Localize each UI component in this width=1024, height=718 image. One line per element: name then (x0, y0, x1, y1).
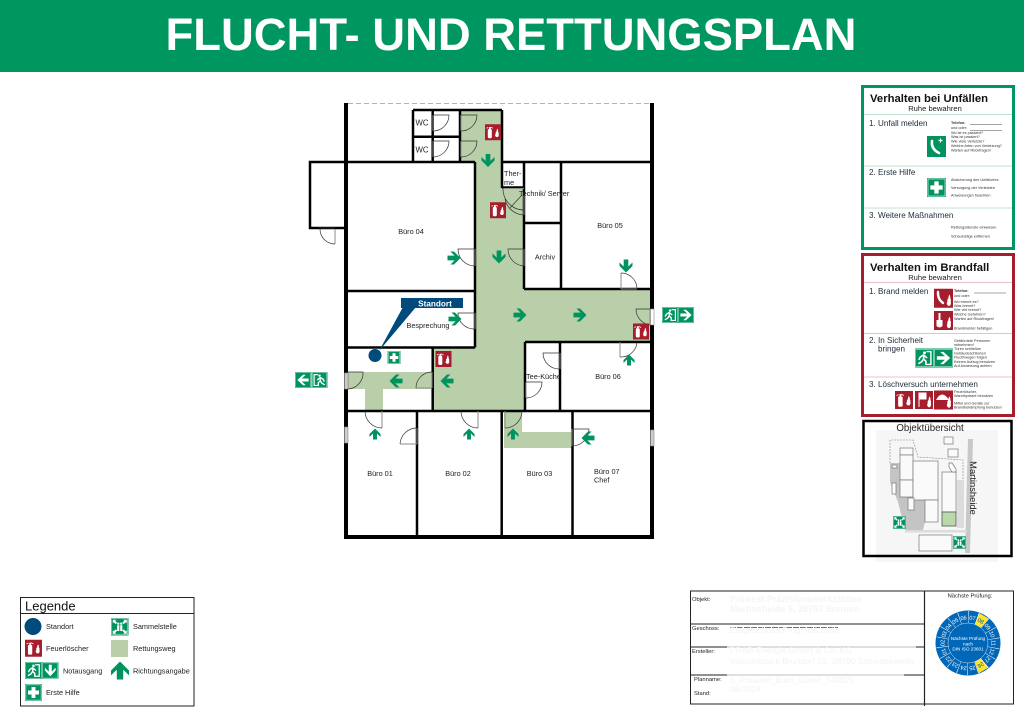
legend: Notausgang: Notausgang (63, 666, 102, 676)
panel: Verhalten im Brandfall: mitnehmen! (954, 343, 974, 347)
field labels: Planname: (694, 677, 722, 683)
field labels: Ersteller: (692, 649, 715, 655)
fire extinguisher signs (436, 124, 649, 367)
panel: Verhalten im Brandfall: Ruhe bewahren (908, 273, 962, 282)
panel: Verhalten im Brandfall (862, 254, 1014, 416)
icon: fire alarm (934, 311, 953, 330)
heading: Objektübersicht (896, 423, 964, 434)
windows (344, 309, 654, 446)
legend: Standort: Standort (46, 622, 74, 631)
panel: Verhalten bei Unfällen: Anweisungen beachten (951, 194, 990, 198)
room labels: Büro 01 (367, 469, 393, 478)
legend: Feuerlöscher: Feuerlöscher (46, 644, 89, 653)
legend: Erste Hilfe: Erste Hilfe (46, 688, 80, 697)
legend: Richtungsangabe: Richtungsangabe (133, 666, 190, 676)
panel: Verhalten bei Unfällen: Schaulustige entfernen (951, 234, 990, 238)
room labels: Büro 02 (445, 469, 471, 478)
exit sign left (295, 372, 328, 388)
inspection seal: 04 (945, 623, 954, 632)
room labels: Büro 03 (527, 469, 552, 478)
panel: Objektübersicht (864, 421, 1012, 562)
legend: Erste Hilfe (25, 684, 80, 701)
field values: Martinsheide 5, 28757 Bremen (730, 604, 859, 614)
inspection seal: 26 (976, 660, 984, 668)
inspection seal: 10 (987, 631, 995, 639)
icon: first aid (927, 178, 946, 197)
panel: Verhalten im Brandfall: Wie viel brennt? (954, 308, 981, 312)
field values: b_Prawest_Buro_Stand_240820 (730, 675, 854, 685)
legend: Rettungsweg: Rettungsweg (133, 644, 176, 653)
inspection seal: 03 (941, 631, 949, 639)
panel: Verhalten bei Unfällen: Verhalten bei Unfällen (870, 93, 988, 105)
panel: legend (20, 598, 194, 706)
panel: Verhalten im Brandfall: bringen (878, 344, 905, 354)
panel: Verhalten im Brandfall: Mittel und Geräte zur (954, 402, 990, 406)
field labels: Objekt: (692, 597, 711, 603)
inspection seal: 24 (960, 664, 967, 671)
panel: Verhalten im Brandfall: Telefon: (954, 289, 968, 293)
legend: Sammelstelle: Sammelstelle (133, 622, 177, 631)
room labels: Ther- (504, 169, 522, 178)
field values: Präwest Präzisionswerkstätten (730, 594, 862, 604)
panel: Verhalten bei Unfällen: und oder: (951, 126, 967, 130)
room labels: WC (416, 118, 429, 128)
field labels (692, 597, 722, 697)
inspection seal: Nächste Prüfung: (948, 594, 993, 600)
panel: Verhalten im Brandfall: Verhalten im Brandfall (870, 262, 989, 274)
panel: Verhalten im Brandfall: Welche Gefahren? (954, 312, 986, 316)
legend: Notausgang (25, 662, 102, 679)
inspection seal: 11 (990, 640, 996, 646)
panel: Verhalten im Brandfall: und oder: (954, 294, 970, 298)
panel: Verhalten im Brandfall: 1. Brand melden (869, 287, 928, 296)
room labels: Büro 06 (595, 372, 621, 381)
location marker (368, 298, 463, 362)
panel: Verhalten bei Unfällen: Absicherung des Unfallortes (951, 178, 999, 182)
panel: Verhalten bei Unfällen: Warten auf Rückfragen! (951, 148, 991, 152)
panel: Verhalten bei Unfällen: Wo ist es passiert? (951, 131, 983, 135)
inspection seal: 22 (945, 654, 954, 663)
icon: fire phone (934, 289, 953, 308)
escape route areas (346, 110, 652, 448)
icons: fire fighting equipment (895, 390, 953, 410)
panel: Verhalten im Brandfall: Warten auf Rückfragen! (954, 317, 994, 321)
inspection seal: 01 (941, 647, 949, 655)
exit sign right (662, 307, 694, 323)
room labels: Chef (594, 476, 610, 484)
field labels: Geschoss: (692, 626, 720, 632)
icon: emergency phone (927, 136, 946, 157)
header bar (0, 0, 1024, 72)
panel: Verhalten bei Unfällen: Wie viele Verletzte? (951, 140, 984, 144)
legend: Richtungsangabe (111, 662, 190, 680)
panel: Verhalten bei Unfällen: 3. Weitere Maßnahmen (869, 211, 953, 220)
inspection seal: DIN ISO 23601 (952, 646, 984, 652)
panel: Verhalten bei Unfällen: Was ist passiert? (951, 135, 980, 139)
inspection seal: 09 (982, 623, 991, 632)
room labels (367, 118, 623, 484)
panel: Verhalten bei Unfällen: 1. Unfall melden (869, 119, 928, 128)
panel: Verhalten im Brandfall: 3. Löschversuch unternehmen (869, 380, 978, 389)
legend: Feuerlöscher (25, 640, 89, 657)
panel: Verhalten im Brandfall: Wandhydrant benutzen (954, 394, 993, 398)
field values: PRAB-Energie GmbH & Co. KG (730, 645, 852, 655)
field values: 08/2024 (730, 684, 761, 694)
room labels: Besprechung (406, 321, 450, 330)
panel: Verhalten im Brandfall: Gefährdete Personen (954, 339, 990, 343)
panel: Verhalten im Brandfall: Feuerlöscher, (954, 390, 977, 394)
inspection seal: 06 (960, 615, 967, 622)
room labels: me (504, 178, 514, 187)
inspection seal: 07 (969, 615, 976, 622)
inspection seal: 12 (987, 647, 995, 655)
title: FLUCHT- UND RETTUNGSPLAN (166, 9, 856, 60)
inspection seal: 08 (976, 618, 984, 626)
inspection seal: 02 (940, 640, 946, 646)
room labels: Technik/ Server (519, 189, 570, 198)
room labels: Büro 05 (597, 221, 623, 230)
panel: Verhalten im Brandfall: Wo brennt es? (954, 300, 979, 304)
room labels: Büro 04 (398, 227, 424, 236)
panel: Verhalten bei Unfällen: Telefon: (951, 121, 965, 125)
panel: Verhalten im Brandfall: Türen schließen (954, 347, 981, 351)
panel: Verhalten bei Unfällen: Welche Arten von Verletzung? (951, 144, 1002, 148)
inspection seal: 05 (952, 618, 960, 626)
location marker: Standort (418, 300, 452, 308)
panel: Verhalten bei Unfällen (862, 86, 1014, 248)
panel: Verhalten im Brandfall: Brandbekämpfung benutzen (954, 406, 1002, 410)
panel: Verhalten im Brandfall: Fluchtwegen folgen (954, 356, 987, 360)
street label: Martinsheide (968, 461, 979, 515)
building walls (310, 103, 654, 539)
inspection seal: 23 (952, 660, 960, 668)
panel: Verhalten im Brandfall: Was brennt? (954, 304, 975, 308)
panel: Verhalten im Brandfall: Gebäudeschließen (954, 352, 986, 356)
legend: Standort (24, 618, 74, 635)
room labels: Büro 07 (594, 467, 620, 476)
legend: Sammelstelle (111, 618, 177, 636)
icon: exit sign (915, 348, 953, 368)
inspection seal: 27 (982, 654, 991, 663)
inspection seal: Nächste Prüfung (951, 636, 986, 641)
panel: Verhalten bei Unfällen: Rettungsdienste einweisen (951, 226, 996, 230)
floor plan (295, 103, 694, 539)
field values (730, 594, 914, 694)
panel: Verhalten bei Unfällen: 2. Erste Hilfe (869, 168, 916, 177)
panel: Verhalten im Brandfall: Keinen Aufzug benutzen (954, 360, 995, 364)
panel: Verhalten bei Unfällen: Versorgung der Verletzten (951, 186, 995, 190)
direction arrows (370, 154, 634, 444)
inspection seal: nach (963, 642, 973, 646)
field labels: Stand: (694, 691, 711, 697)
inspection seal (936, 594, 1000, 676)
inspection seal: 25 (969, 664, 976, 671)
first aid sign (388, 351, 400, 364)
room labels: WC (416, 146, 429, 154)
site map (890, 437, 973, 553)
doors (319, 115, 651, 446)
panel: Verhalten im Brandfall: Brandmelder betätigen (954, 326, 992, 330)
field values: Industriepark Brundorf 22, 28790 Schwanewede (730, 656, 914, 666)
panel: Verhalten im Brandfall: 2. In Sicherheit (869, 336, 924, 345)
title block (690, 591, 1014, 706)
legend: Rettungsweg (111, 640, 176, 657)
room labels: Tee-Küche (526, 372, 561, 381)
room labels: Archiv (535, 252, 555, 262)
legend heading: Legende (25, 598, 76, 614)
panel: Verhalten bei Unfällen: Ruhe bewahren (908, 104, 962, 113)
panel: Verhalten im Brandfall: Auf Anweisung achten (954, 364, 992, 368)
field values: Erdgeschoss Prog. Industrie (730, 625, 838, 635)
